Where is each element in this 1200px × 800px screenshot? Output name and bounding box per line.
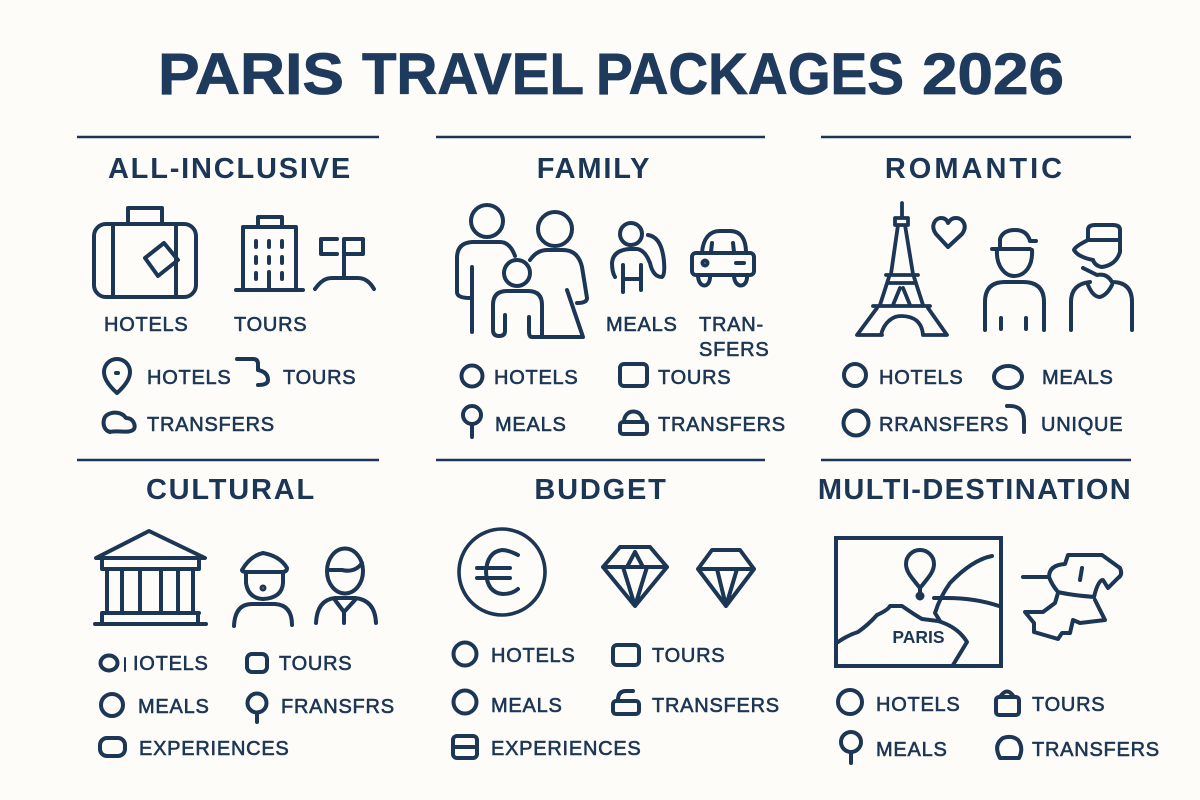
icon: bag bbox=[996, 692, 1019, 715]
label: hotels: HOTELS bbox=[879, 367, 964, 389]
icon: rounded rect bbox=[100, 738, 125, 756]
heading: all-inclusive: ALL-INCLUSIVE bbox=[108, 153, 352, 185]
icon: person with arm bbox=[612, 223, 664, 292]
panel: multi-destination bbox=[818, 474, 1160, 763]
label: hotels: IOTELS bbox=[133, 653, 209, 675]
label: hotels: HOTELS bbox=[147, 367, 232, 389]
label: tours: TOURS bbox=[234, 314, 307, 336]
label: tours: TOURS bbox=[279, 653, 352, 675]
icon: suitcase bbox=[94, 208, 196, 297]
icon: briefcase bbox=[613, 691, 639, 714]
icon: cloud bbox=[104, 413, 135, 432]
icon: circle bbox=[462, 366, 482, 386]
icon: eiffel tower bbox=[857, 203, 947, 335]
label: meals: MEALS bbox=[876, 739, 948, 761]
label: transfers hyphenated bbox=[699, 314, 769, 361]
icon: euro coin bbox=[459, 529, 545, 615]
icon: guide with cap bbox=[234, 553, 292, 626]
icon: lock bbox=[620, 412, 647, 434]
icon: heart bbox=[933, 218, 965, 247]
label: hotels: HOTELS bbox=[876, 694, 961, 716]
label: map paris: PARIS bbox=[892, 627, 945, 647]
icon: oval bbox=[994, 366, 1022, 388]
icon: guide with hair bbox=[316, 548, 376, 623]
icon: pin bbox=[104, 359, 130, 393]
icon: circle bbox=[838, 690, 862, 714]
title: PACKAGES bbox=[596, 42, 904, 107]
panel: family bbox=[457, 153, 786, 437]
label: meals: MEALS bbox=[1042, 367, 1114, 389]
icon: diamond small bbox=[698, 550, 754, 606]
icon: pin bbox=[248, 694, 266, 722]
icon: square bbox=[247, 654, 267, 672]
title: 2026 bbox=[922, 42, 1064, 107]
icon: car bbox=[692, 231, 754, 286]
label: meals: MEALS bbox=[606, 314, 678, 336]
icon: person with hat bbox=[985, 230, 1044, 330]
panel: all-inclusive bbox=[94, 153, 374, 436]
title bbox=[158, 42, 1064, 107]
heading: romantic: ROMANTIC bbox=[885, 153, 1065, 185]
icon: person with cap bbox=[1071, 225, 1132, 330]
label: transfers hyphenated: TRAN- bbox=[699, 314, 764, 336]
icon: circle bbox=[844, 410, 868, 436]
icon: split box bbox=[453, 736, 477, 758]
heading: family: FAMILY bbox=[537, 153, 651, 185]
label: tours: TOURS bbox=[658, 367, 731, 389]
heading: cultural: CULTURAL bbox=[146, 474, 316, 506]
title: TRAVEL bbox=[362, 42, 584, 107]
label: hotels: HOTELS bbox=[491, 645, 576, 667]
label: tours: TOURS bbox=[1032, 694, 1105, 716]
panel: budget bbox=[453, 474, 780, 760]
panel: romantic bbox=[844, 153, 1132, 436]
icon: hotel building bbox=[236, 217, 303, 290]
label: meals: MEALS bbox=[491, 695, 563, 717]
label: tours: TOURS bbox=[652, 645, 725, 667]
icon: square bbox=[620, 364, 647, 386]
label: transfers: FRANSFRS bbox=[281, 696, 395, 718]
label: transfers: TRANSFERS bbox=[1032, 739, 1160, 761]
icon: circle bbox=[101, 694, 123, 716]
label: unique: UNIQUE bbox=[1041, 414, 1123, 436]
label: tours: TOURS bbox=[283, 367, 356, 389]
icon: circle bbox=[844, 364, 866, 386]
label: transfers: TRANSFERS bbox=[652, 695, 780, 717]
label: experiences: EXPERIENCES bbox=[491, 738, 642, 760]
label: hotels: HOTELS bbox=[104, 314, 189, 336]
icon: pin bbox=[841, 732, 861, 763]
label: transfers: TRANSFERS bbox=[147, 414, 275, 436]
label: transfers: TRANSFERS bbox=[658, 414, 786, 436]
icon: tour corner bbox=[237, 359, 268, 385]
label: meals: MEALS bbox=[495, 414, 567, 436]
label: transfers hyphenated: SFERS bbox=[699, 339, 769, 361]
icon: map of france bbox=[1023, 555, 1121, 639]
icon: square bbox=[613, 645, 639, 665]
icon: family bbox=[457, 205, 587, 337]
panel: cultural bbox=[95, 474, 395, 760]
heading: multi-destination: MULTI-DESTINATION bbox=[818, 474, 1132, 506]
label: meals: MEALS bbox=[138, 696, 210, 718]
icon: map of paris bbox=[836, 538, 1001, 666]
label: transfers: RRANSFERS bbox=[879, 414, 1009, 436]
icon: diamond bbox=[603, 547, 667, 606]
icon: hook bbox=[1007, 406, 1024, 432]
title: PARIS bbox=[158, 42, 344, 107]
icon: flag on hill bbox=[315, 239, 374, 289]
icon: dome bbox=[997, 737, 1021, 758]
heading: budget: BUDGET bbox=[534, 474, 668, 506]
icon: museum bbox=[95, 531, 206, 624]
icon: pin bbox=[463, 406, 481, 437]
icon: circle bbox=[454, 690, 476, 714]
icon: circle bbox=[454, 642, 476, 666]
icon: half circle bbox=[100, 656, 125, 671]
label: experiences: EXPERIENCES bbox=[139, 738, 290, 760]
label: hotels: HOTELS bbox=[494, 367, 579, 389]
